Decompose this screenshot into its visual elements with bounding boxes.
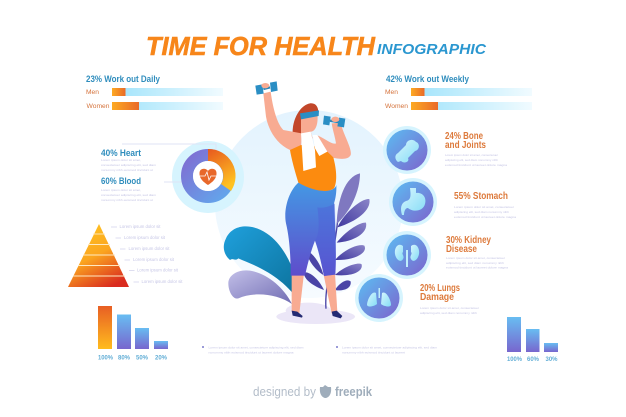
panel: heart and blood text: consectetuer adipiscing elit, sed diam bbox=[101, 193, 157, 197]
panel: heart and blood text: consectetuer adipiscing elit, sed diam bbox=[101, 163, 157, 167]
text: bone and joints: adipiscing elit, sed diam nonummy nibh bbox=[445, 158, 498, 162]
bar chart: right: 30% bbox=[546, 356, 558, 363]
illustration: woman with dumbbells and plants bbox=[224, 81, 370, 324]
text: bottom note two: nonummy nibh euismod tincidunt ut laoreet bbox=[342, 350, 405, 354]
panel: work out daily: Men bbox=[86, 89, 99, 96]
text: lungs damage: Damage bbox=[420, 291, 454, 303]
tank top bbox=[290, 145, 336, 192]
text: kidney disease: euismod tincidunt ut laoreet dolore magna bbox=[446, 266, 508, 270]
text: lungs damage: 20% Lungs bbox=[420, 282, 460, 294]
left arm raised bbox=[263, 92, 302, 150]
pants bbox=[285, 183, 336, 276]
panel: heart and blood text bbox=[101, 148, 157, 202]
icon: bone and joints bbox=[383, 126, 431, 174]
panel: work out weekly: 42% Work out Weekly bbox=[386, 74, 469, 84]
footer: freepik credit: freepik bbox=[335, 384, 373, 399]
text: lungs damage: adipiscing elit, sed diam nonummy nibh bbox=[420, 311, 477, 315]
pyramid labels: Lorem ipsum dolor sit bbox=[137, 268, 179, 272]
hair bbox=[293, 103, 318, 135]
title bbox=[146, 31, 487, 61]
title: TIME FOR HEALTH bbox=[146, 31, 376, 61]
pyramid labels: Lorem ipsum dolor sit bbox=[133, 257, 175, 262]
panel: work out daily: 23% Work out Daily bbox=[86, 74, 160, 84]
bar chart: left: 80% bbox=[118, 354, 130, 362]
neck and face bbox=[301, 113, 318, 138]
text: bone and joints: Lorem ipsum dolor sit amet, consectetuer bbox=[445, 153, 498, 157]
bar chart: right bbox=[507, 317, 558, 363]
panel: work out weekly: Women bbox=[385, 103, 408, 110]
icon: lungs bbox=[355, 274, 403, 322]
text: bottom note one bbox=[202, 346, 304, 354]
panel: heart and blood text: nonummy nibh euismod tincidunt ut bbox=[101, 168, 153, 172]
bar chart: right: 60% bbox=[527, 356, 539, 363]
pyramid labels: Lorem ipsum dolor sit bbox=[124, 235, 166, 240]
panel: work out daily: Women bbox=[86, 103, 110, 110]
panel: heart and blood text: 40% Heart bbox=[101, 148, 141, 158]
panel: heart and blood text: Lorem ipsum dolor sit amet, bbox=[101, 158, 141, 162]
teal leaf bbox=[224, 226, 300, 302]
bar chart: right: 100% bbox=[507, 356, 522, 363]
pyramid labels: Lorem ipsum dolor sit bbox=[142, 279, 183, 284]
panel: work out daily bbox=[86, 74, 223, 110]
text: stomach: euismod tincidunt ut laoreet dolore magna bbox=[454, 215, 516, 219]
icon: stomach bbox=[389, 178, 437, 226]
text: kidney disease: 30% Kidney bbox=[446, 234, 491, 246]
text: stomach bbox=[454, 190, 516, 219]
pyramid chart bbox=[68, 224, 129, 287]
dumbbell right bbox=[323, 116, 345, 127]
text: bone and joints: and Joints bbox=[445, 139, 486, 151]
pants fold bbox=[315, 203, 336, 276]
legs bbox=[292, 273, 337, 313]
text: bottom note two bbox=[336, 346, 438, 354]
bar chart: left: 100% bbox=[98, 354, 113, 362]
pyramid labels: Lorem ipsum dolor sit bbox=[120, 224, 161, 229]
text: stomach: 55% Stomach bbox=[454, 190, 508, 202]
text: lungs damage bbox=[420, 282, 479, 315]
panel: work out weekly: Men bbox=[385, 89, 398, 96]
icon: heart bbox=[199, 169, 217, 185]
bar chart: left bbox=[98, 306, 168, 362]
text: bottom note one: Lorem ipsum dolor sit amet, consectetuer adipiscing elit, sed diam bbox=[208, 346, 304, 350]
title: INFOGRAPHIC bbox=[377, 41, 487, 58]
shoes bbox=[292, 311, 342, 318]
text: bottom note two: Lorem ipsum dolor sit amet, consectetuer adipiscing elit, sed diam bbox=[342, 346, 438, 350]
headband bbox=[300, 110, 319, 119]
icon: kidney bbox=[383, 231, 431, 279]
ground shadow bbox=[276, 303, 355, 324]
text: stomach: Lorem ipsum dolor sit amet, consectetuer bbox=[454, 205, 514, 209]
right arm bbox=[315, 123, 351, 159]
panel: work out weekly bbox=[385, 74, 532, 110]
pyramid labels bbox=[111, 224, 183, 284]
bar chart: left: 20% bbox=[155, 354, 167, 362]
text: kidney disease bbox=[446, 234, 508, 270]
lavender leaf bbox=[228, 270, 292, 304]
donut chart bbox=[122, 141, 244, 213]
text: bone and joints: euismod tincidunt ut laoreet dolore magna bbox=[445, 163, 507, 167]
text: bone and joints bbox=[445, 130, 507, 167]
towel bbox=[301, 132, 327, 171]
text: bottom note one: nonummy nibh euismod tincidunt ut laoreet dolore magna bbox=[208, 350, 294, 354]
text: kidney disease: adipiscing elit, sed diam nonummy nibh bbox=[446, 261, 504, 265]
dumbbell left bbox=[255, 81, 278, 95]
purple plant bbox=[304, 173, 370, 309]
pyramid labels: Lorem ipsum dolor sit bbox=[128, 246, 170, 251]
panel: heart and blood text: nonummy nibh euismod tincidunt ut bbox=[101, 198, 153, 202]
panel: heart and blood text: 60% Blood bbox=[101, 176, 141, 186]
text: stomach: adipiscing elit, sed diam nonummy nibh bbox=[454, 210, 509, 214]
footer: freepik credit bbox=[253, 384, 373, 399]
text: lungs damage: Lorem ipsum dolor sit amet, consectetuer bbox=[420, 306, 479, 310]
bar chart: left: 50% bbox=[136, 354, 148, 362]
text: kidney disease: Lorem ipsum dolor sit amet, consectetuer bbox=[446, 256, 505, 260]
panel: heart and blood text: Lorem ipsum dolor sit amet, bbox=[101, 188, 141, 192]
text: bone and joints: 24% Bone bbox=[445, 130, 483, 142]
background circle bbox=[215, 110, 403, 298]
footer: freepik credit: designed by bbox=[253, 385, 317, 399]
text: kidney disease: Disease bbox=[446, 243, 477, 255]
